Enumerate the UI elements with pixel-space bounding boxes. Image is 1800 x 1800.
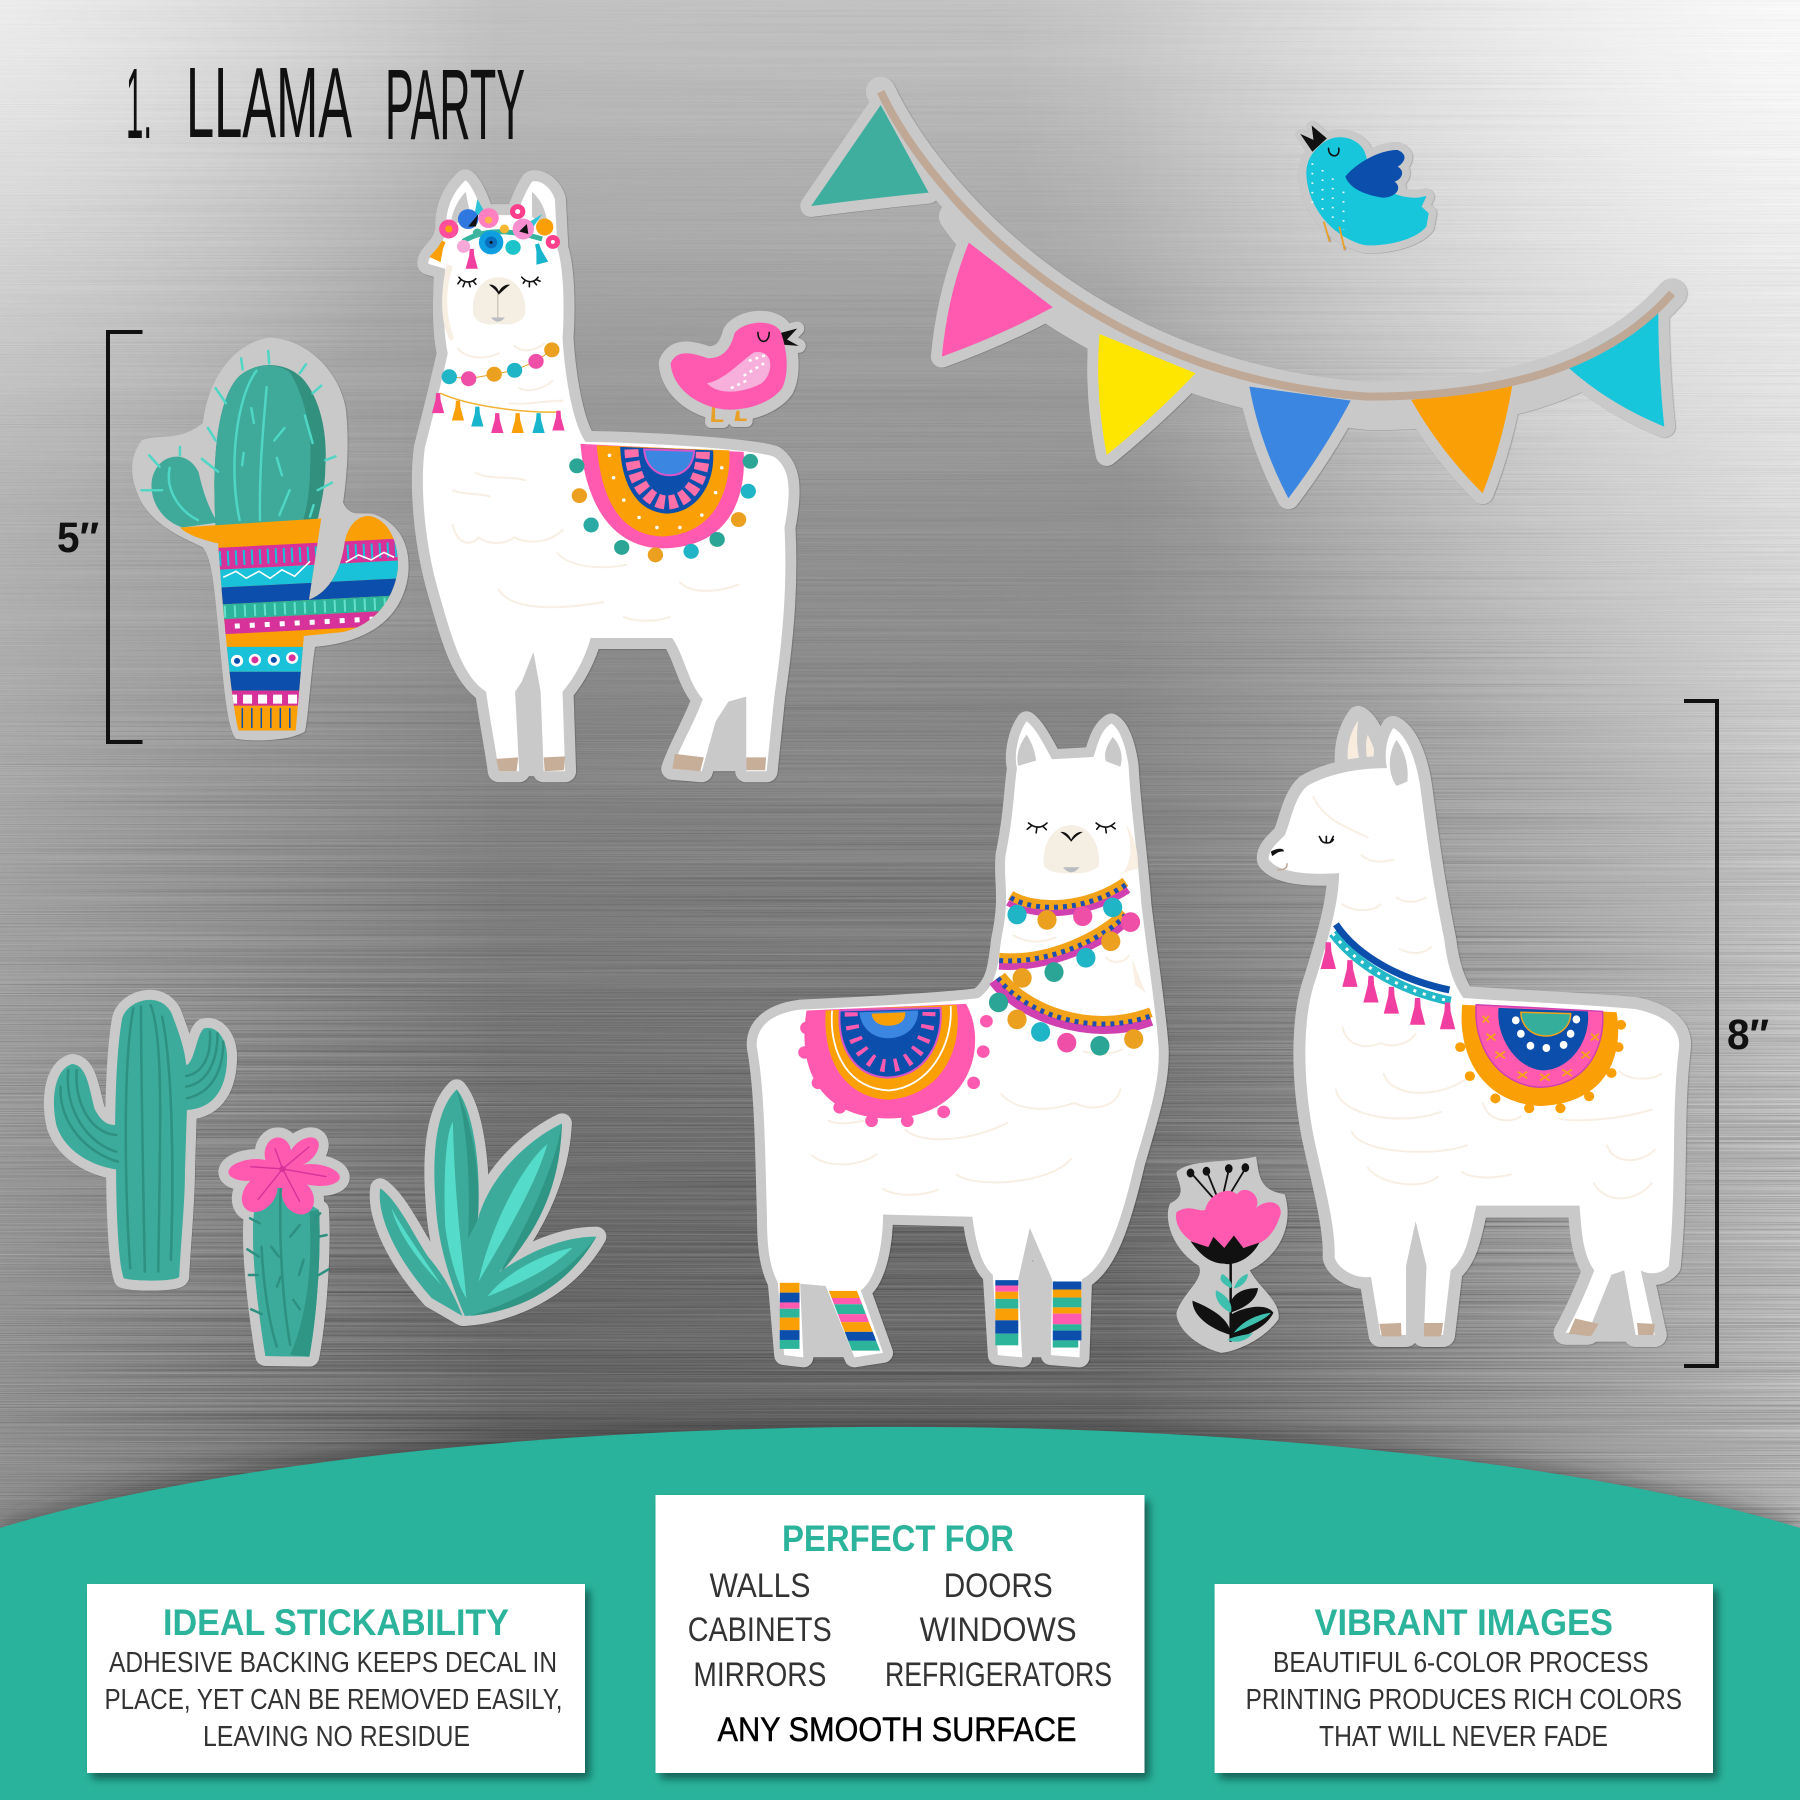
heading: PERFECT FOR (782, 1517, 1014, 1559)
sticker: striped poncho cactus (132, 337, 415, 740)
striped socks (780, 1280, 1081, 1351)
blanket (1455, 1005, 1626, 1113)
flower crown (429, 199, 560, 269)
surface list: DOORS (944, 1567, 1053, 1605)
any smooth surface: ANY SMOOTH SURFACE (718, 1711, 1076, 1749)
body text: LEAVING NO RESIDUE (203, 1721, 470, 1753)
face (458, 277, 540, 324)
body (757, 721, 1159, 1357)
heading: IDEAL STICKABILITY (163, 1601, 509, 1643)
panel: ideal stickability (87, 1584, 585, 1773)
body text (1246, 1647, 1682, 1753)
far ear (1346, 717, 1382, 773)
heading: VIBRANT IMAGES (1314, 1601, 1613, 1643)
tassel necklace (432, 393, 565, 433)
sticker: blue bird (1300, 126, 1429, 250)
face (1271, 836, 1333, 870)
text: PARTY (385, 49, 525, 161)
pink flower (227, 1132, 341, 1218)
cactus top (142, 351, 336, 528)
sticker: bunting banner (811, 92, 1672, 498)
pompom necklace (442, 342, 559, 386)
surface list: WINDOWS (920, 1611, 1077, 1649)
sticker: llama with flower crown (423, 180, 789, 776)
body (423, 180, 789, 771)
size bracket: 8 inch (1684, 701, 1769, 1366)
hooves (1379, 1319, 1655, 1336)
hooves (496, 754, 766, 771)
body text: PRINTING PRODUCES RICH COLORS (1246, 1684, 1682, 1716)
title: 1. (126, 48, 152, 160)
plant halo (380, 1089, 596, 1316)
title: LLAMA (186, 47, 352, 159)
surface list (688, 1567, 1112, 1694)
blanket (798, 1004, 993, 1127)
size bracket: 5 inch: 5″ (57, 514, 99, 562)
wing (707, 352, 770, 392)
wool lines (453, 343, 739, 621)
blanket (580, 444, 744, 548)
surface list: REFRIGERATORS (885, 1656, 1112, 1694)
flags (811, 105, 1664, 498)
tassel necklace (1321, 924, 1455, 1029)
size bracket: 5 inch (57, 332, 142, 742)
body text: ADHESIVE BACKING KEEPS DECAL IN (109, 1647, 557, 1679)
teal footer arc (0, 1427, 1800, 1800)
body text: PLACE, YET CAN BE REMOVED EASILY, (104, 1684, 562, 1716)
size bracket: 8 inch: 8″ (1727, 1011, 1769, 1059)
face (1027, 823, 1115, 873)
sticker: tall saguaro cactus (54, 1000, 227, 1281)
poncho stripes (180, 516, 398, 730)
sticker: fluffy llama side view (1269, 717, 1679, 1342)
surface list: CABINETS (688, 1611, 832, 1649)
wool lines (812, 936, 1129, 1195)
wool lines (1314, 797, 1661, 1198)
panel: vibrant images (1215, 1584, 1713, 1773)
sticker: pink bird (671, 323, 799, 422)
panel: perfect for (656, 1495, 1144, 1773)
sticker: agave plant (380, 1089, 596, 1316)
body (1269, 728, 1679, 1335)
sticker: pink tulip flower (1168, 1156, 1288, 1353)
blanket pompoms (569, 454, 758, 562)
bunting halo (811, 92, 1672, 498)
triple garland necklace (989, 882, 1151, 1056)
string (881, 92, 1672, 397)
sticker: llama with striped socks (757, 721, 1159, 1357)
body text: THAT WILL NEVER FADE (1319, 1721, 1608, 1753)
surface list: WALLS (710, 1567, 810, 1605)
flower halo (227, 1132, 341, 1218)
body text: BEAUTIFUL 6-COLOR PROCESS (1273, 1647, 1649, 1679)
sticker: flowering cactus (227, 1132, 341, 1357)
surface list: MIRRORS (693, 1656, 826, 1694)
body text (104, 1647, 562, 1753)
